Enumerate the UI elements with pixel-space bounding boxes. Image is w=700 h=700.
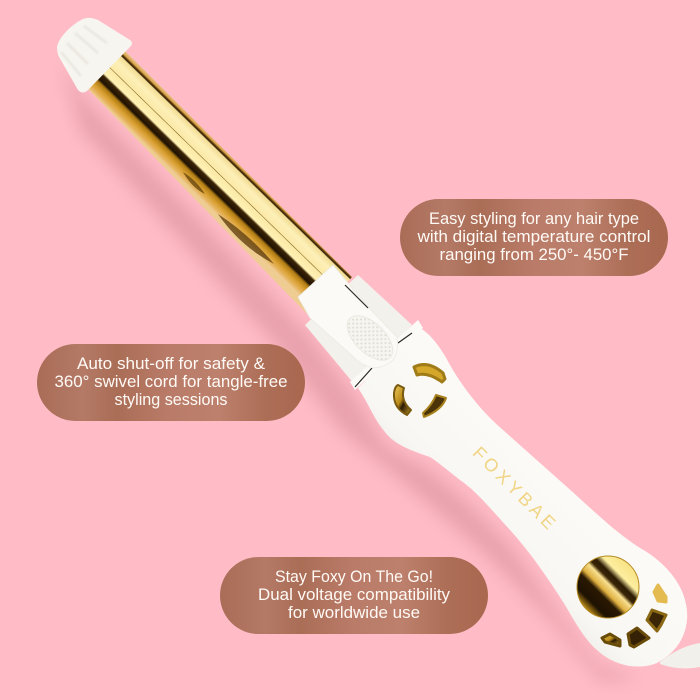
clamp sleeve bbox=[305, 275, 412, 385]
callout: dual voltage: for worldwide use bbox=[288, 604, 420, 622]
iron drop shadow bbox=[62, 62, 640, 680]
callout: auto shut-off: Auto shut-off for safety & bbox=[77, 355, 265, 373]
callout: dual voltage: Dual voltage compatibility bbox=[258, 586, 451, 604]
callout: auto shut-off: 360° swivel cord for tangle-free bbox=[54, 373, 288, 391]
white barrel tip bbox=[57, 18, 132, 93]
clamp lever bbox=[298, 265, 401, 368]
callout: auto shut-off bbox=[37, 344, 305, 421]
textured grip bbox=[339, 308, 401, 368]
gold barrel bbox=[86, 49, 352, 320]
mode buttons bbox=[394, 365, 446, 417]
brand name: FOXYBAE bbox=[469, 443, 559, 533]
sleeve ring bbox=[350, 320, 423, 390]
handle body bbox=[358, 328, 687, 667]
power cord bbox=[660, 643, 700, 668]
control buttons bbox=[602, 585, 666, 647]
callout: dual voltage: Stay Foxy On The Go! bbox=[275, 568, 433, 586]
callout: temperature control: Easy styling for any hair type bbox=[429, 210, 639, 228]
callout: temperature control bbox=[400, 199, 668, 276]
clamp slot line bbox=[345, 285, 368, 308]
callout: temperature control: ranging from 250°- 450°F bbox=[440, 246, 628, 264]
callout: auto shut-off: styling sessions bbox=[114, 391, 228, 409]
ring gap lines bbox=[355, 333, 412, 387]
gold dial bbox=[577, 556, 639, 618]
callout: dual voltage bbox=[220, 557, 488, 634]
callout: temperature control: with digital temperature control bbox=[416, 228, 650, 246]
